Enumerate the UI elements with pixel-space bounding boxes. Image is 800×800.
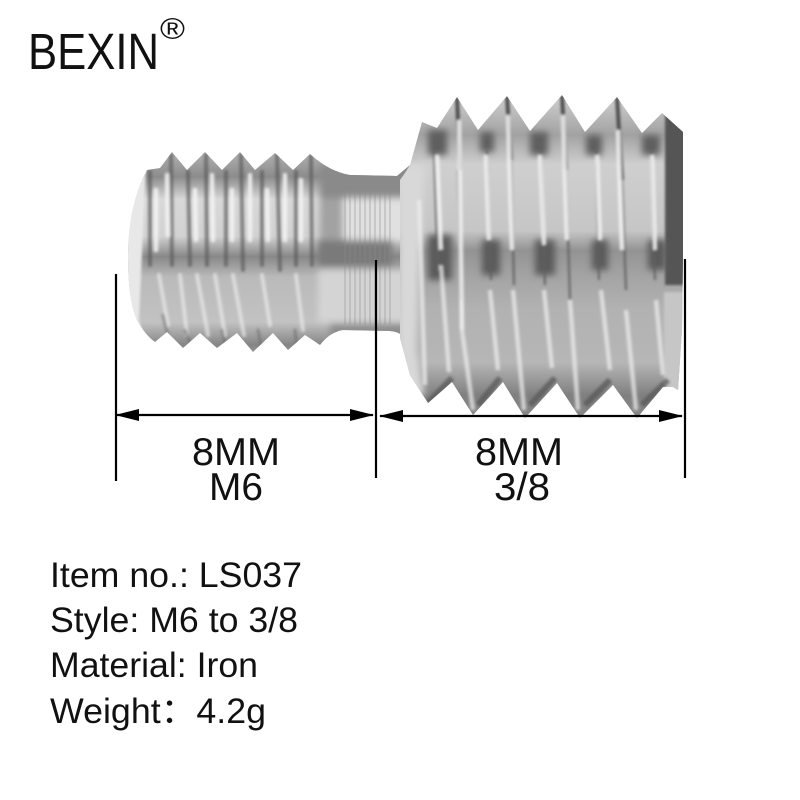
label: 3/8 dimension: 3/8: [494, 466, 550, 509]
arrow: M6 length: [116, 414, 373, 416]
specifications text: Item no.: LS037: [50, 556, 302, 595]
photo: threaded adapter screw: [125, 92, 688, 422]
specifications text: Weight：4.2g: [50, 692, 266, 731]
logo: BEXIN: BEXIN: [28, 23, 159, 80]
specifications text: Material: Iron: [50, 646, 258, 685]
specifications text: [50, 556, 302, 731]
label: M6 dimension: M6: [209, 466, 263, 509]
logo: BEXIN: ®: [160, 13, 185, 46]
small M6 threaded end: [125, 150, 415, 355]
arrow: 3/8 length: [380, 415, 682, 417]
label: M6 dimension: [192, 431, 280, 509]
label: 3/8 dimension: 8MM: [475, 431, 563, 474]
label: M6 dimension: 8MM: [192, 431, 280, 474]
dimension: middle vertical line: [375, 260, 377, 478]
large 3/8 threaded end: [398, 92, 688, 422]
dimension: right vertical line: [684, 259, 686, 478]
label: 3/8 dimension: [475, 431, 563, 509]
dimension: left vertical line: [115, 274, 117, 481]
neck: [318, 165, 410, 350]
specifications text: Style: M6 to 3/8: [50, 601, 298, 640]
